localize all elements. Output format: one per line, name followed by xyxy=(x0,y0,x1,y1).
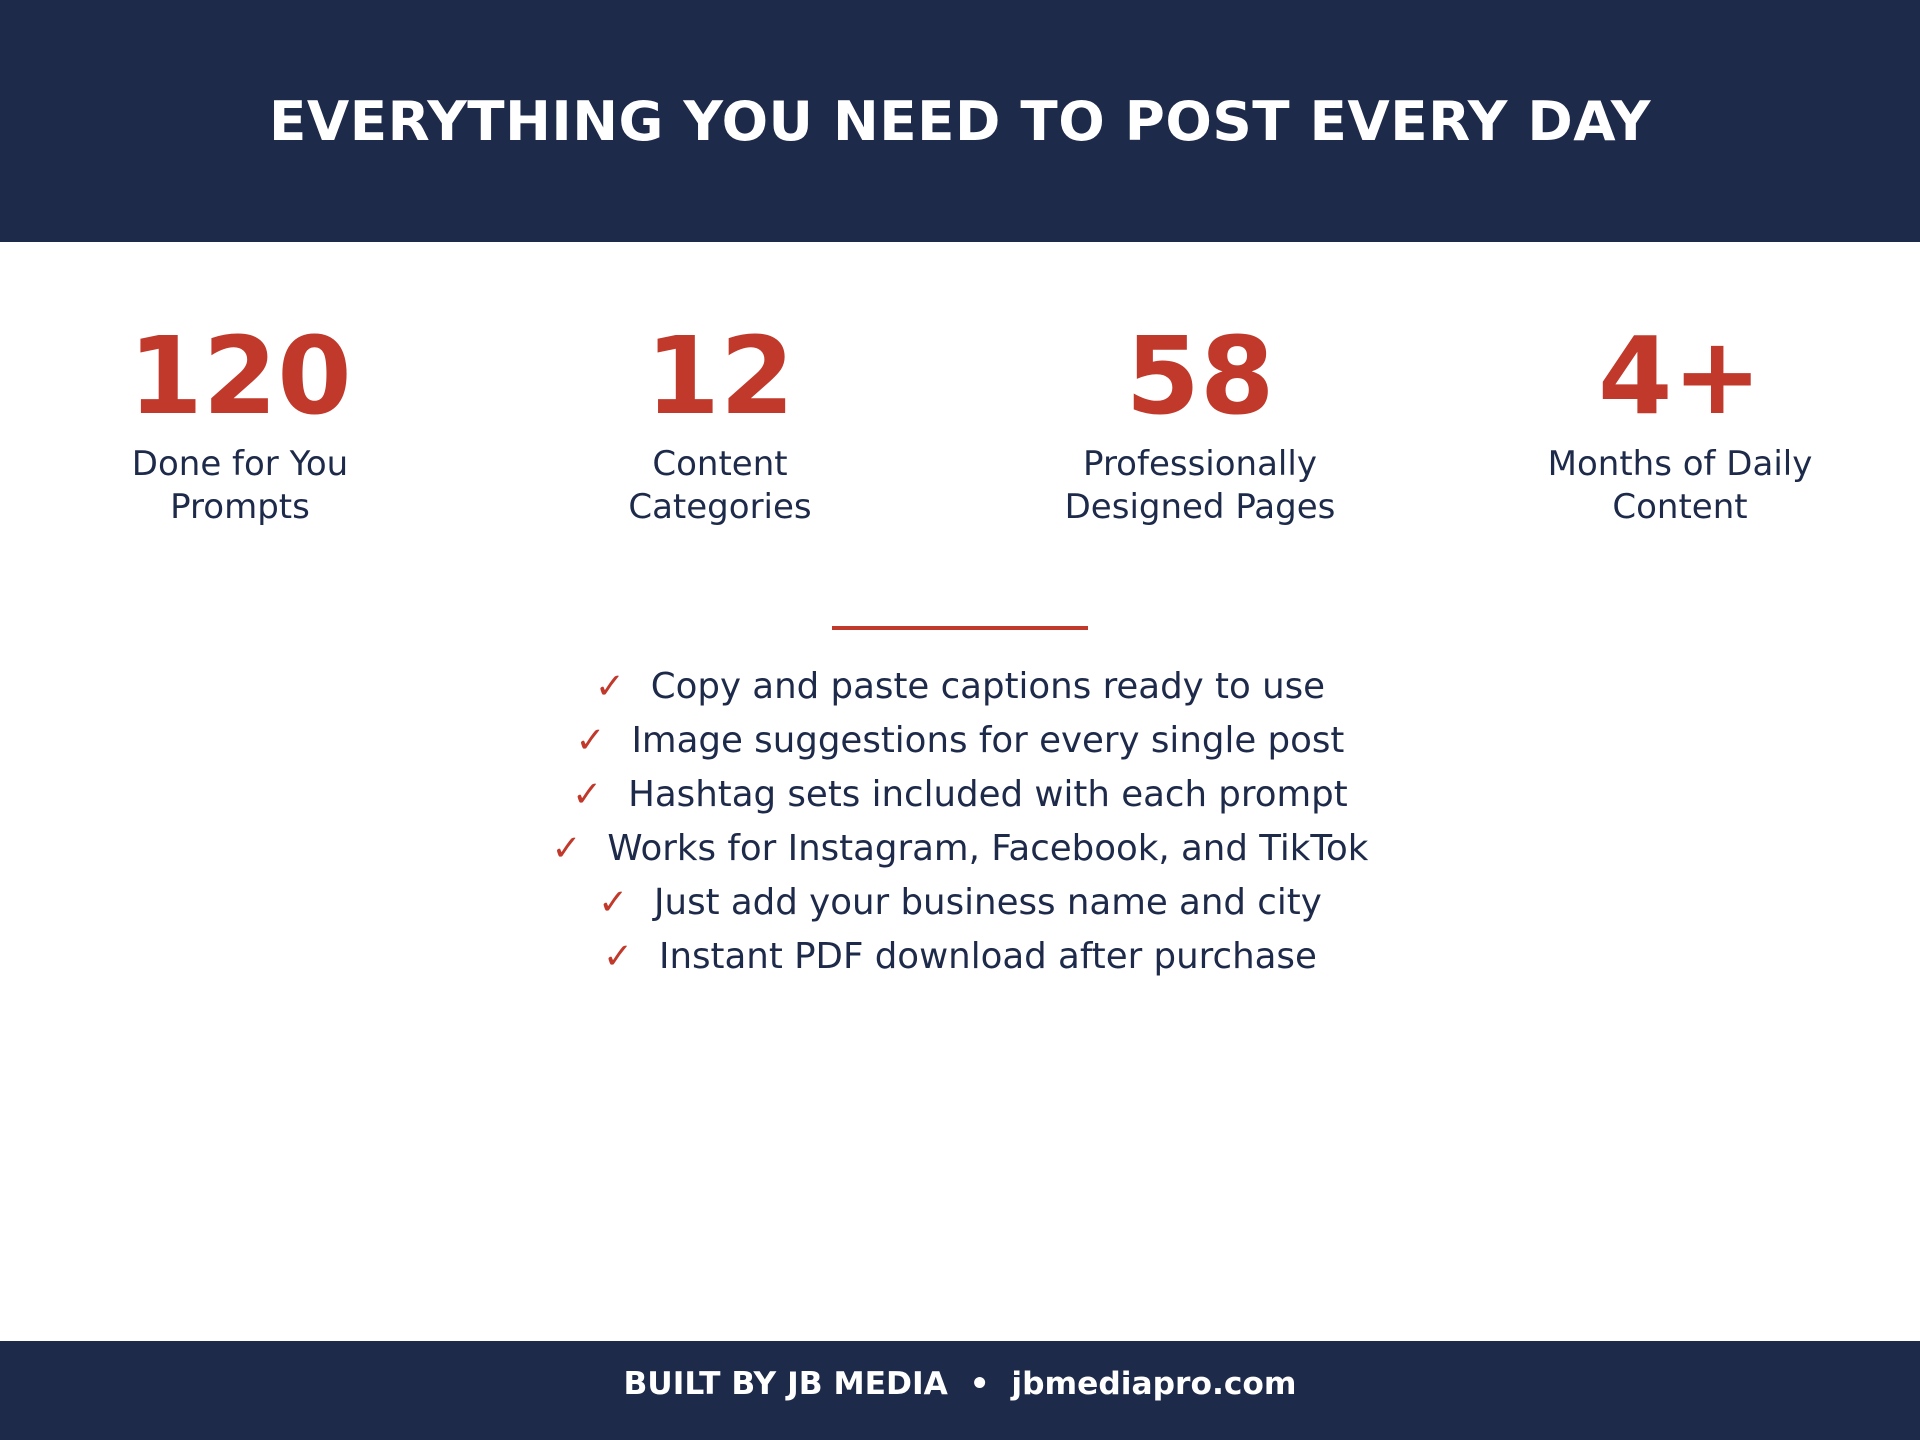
stat: 120 prompts: Prompts xyxy=(170,487,310,527)
stat: 120 prompts: Done for You xyxy=(132,444,348,484)
stat: 58 pages: 58 xyxy=(1126,315,1274,439)
stat: 58 pages: Professionally xyxy=(1083,444,1317,484)
footer: BUILT BY JB MEDIA • jbmediapro.com xyxy=(623,1366,1297,1402)
stat: 4+ months xyxy=(1548,315,1812,527)
stat: 58 pages xyxy=(1065,315,1335,527)
stat: 4+ months: Months of Daily xyxy=(1548,444,1812,484)
stat: 12 categories: Categories xyxy=(628,487,812,527)
stat: 4+ months: Content xyxy=(1612,487,1748,527)
header bar xyxy=(0,0,1920,242)
checklist: ✓ Instant PDF download after purchase xyxy=(603,936,1317,977)
checklist: ✓ Copy and paste captions ready to use xyxy=(595,666,1325,707)
checklist xyxy=(552,666,1368,977)
checklist: ✓ Just add your business name and city xyxy=(598,882,1322,923)
title: EVERYTHING YOU NEED TO POST EVERY DAY xyxy=(269,89,1651,153)
stat: 4+ months: 4+ xyxy=(1598,315,1762,439)
footer xyxy=(0,1341,1920,1440)
stat: 58 pages: Designed Pages xyxy=(1065,487,1335,527)
checklist: ✓ Works for Instagram, Facebook, and TikTok xyxy=(552,828,1368,869)
stat: 12 categories: 12 xyxy=(646,315,794,439)
divider accent xyxy=(832,626,1088,630)
checklist: ✓ Image suggestions for every single post xyxy=(576,720,1344,761)
stat: 12 categories xyxy=(628,315,812,527)
stat: 12 categories: Content xyxy=(652,444,788,484)
checklist: ✓ Hashtag sets included with each prompt xyxy=(572,774,1348,815)
stat: 120 prompts: 120 xyxy=(128,315,352,439)
stat: 120 prompts xyxy=(128,315,352,527)
